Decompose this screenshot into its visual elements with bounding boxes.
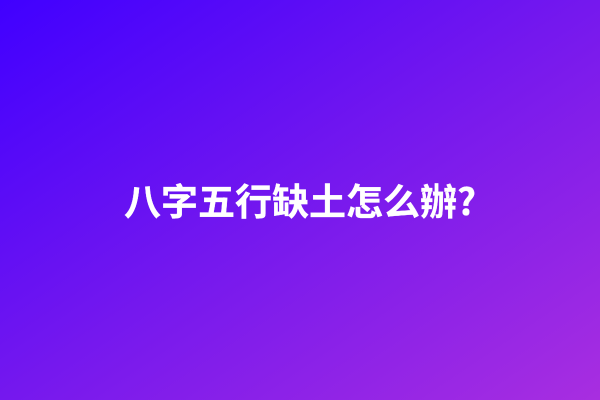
- title: 八字五行缺土怎么辦?: [124, 172, 476, 226]
